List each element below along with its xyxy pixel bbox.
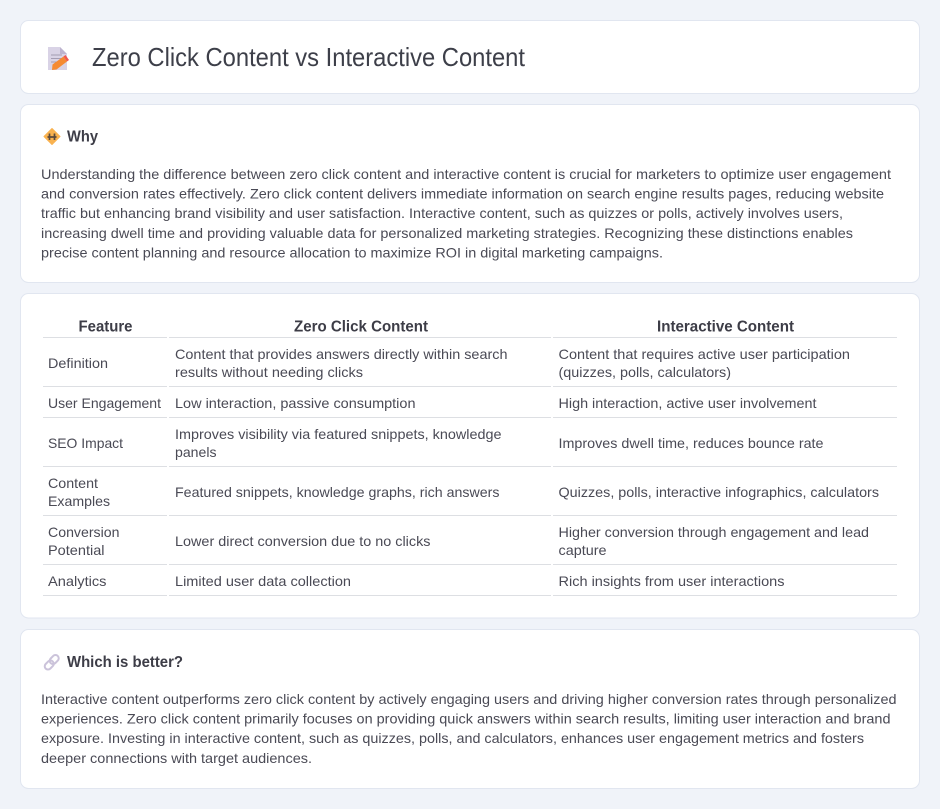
icon: chain link [43, 654, 60, 671]
text block: which is better paragraph: experiences. Zero click content primarily focuses on providing quick answers within search results, limiting user interaction and brand [41, 711, 890, 727]
panel: comparison table [20, 294, 920, 618]
panel: why [20, 104, 920, 282]
row: definition: Definition [48, 355, 108, 371]
row: definition [48, 346, 850, 380]
row: analytics [48, 573, 784, 589]
row: seo impact: SEO Impact [48, 435, 123, 451]
text block: why paragraph: increasing dwell time and providing valuable data for personalized marketing strategies. Recognizing these distinctions enables [41, 225, 853, 241]
heading: which is better: Which is better? [67, 654, 183, 671]
table header row: Zero Click Content [294, 318, 429, 336]
row: content examples: Featured snippets, knowledge graphs, rich answers [175, 484, 499, 500]
row: conversion potential [48, 524, 869, 558]
row: content examples [48, 475, 879, 509]
text block: why paragraph: traffic but enhancing brand visibility and user satisfaction. Interactive content, such as quizzes or polls, actively involves users, [41, 205, 843, 221]
row: definition: Content that provides answers directly within search [175, 346, 508, 362]
panel: which is better [20, 630, 920, 788]
text block: why paragraph: and conversion rates effectively. Zero click content delivers immediate information on search engine results pages, reducing website [41, 186, 884, 202]
text block: which is better paragraph [41, 691, 896, 766]
table header row [78, 318, 795, 336]
text block: which is better paragraph: exposure. Investing in interactive content, such as quizzes, polls, and calculators, enhances user engagement metrics and fosters [41, 730, 864, 746]
row: analytics: Limited user data collection [175, 573, 351, 589]
row: definition: results without needing clicks [175, 364, 363, 380]
panel: header [20, 20, 920, 94]
title: Zero Click Content vs Interactive Content [92, 44, 525, 72]
row: content examples: Content [48, 475, 98, 491]
table header row: Interactive Content [657, 318, 795, 336]
row: user engagement: Low interaction, passive consumption [175, 395, 416, 411]
icon: warning diamond [44, 128, 60, 144]
row: content examples: Quizzes, polls, interactive infographics, calculators [558, 484, 879, 500]
row: seo impact: panels [175, 444, 216, 460]
row: user engagement: High interaction, active user involvement [558, 395, 817, 411]
row: conversion potential: Higher conversion through engagement and lead [558, 524, 869, 540]
row: seo impact: Improves dwell time, reduces bounce rate [558, 435, 824, 451]
row: user engagement: User Engagement [48, 395, 161, 411]
row: conversion potential: Conversion [48, 524, 120, 540]
row: analytics: Analytics [48, 573, 106, 589]
row: definition: (quizzes, polls, calculators) [558, 364, 731, 380]
row: conversion potential: Potential [48, 542, 104, 558]
row: content examples: Examples [48, 493, 110, 509]
text block: why paragraph [41, 166, 891, 260]
row: seo impact [48, 426, 824, 460]
text block: why paragraph: precise content planning and resource allocation to maximize ROI in digital marketing campaigns. [41, 244, 663, 260]
row: seo impact: Improves visibility via featured snippets, knowledge [175, 426, 502, 442]
row: user engagement [48, 395, 817, 411]
row: definition: Content that requires active user participation [558, 346, 850, 362]
row: conversion potential: Lower direct conversion due to no clicks [175, 533, 430, 549]
row: conversion potential: capture [558, 542, 607, 558]
row: analytics: Rich insights from user interactions [558, 573, 784, 589]
table header row: Feature [78, 318, 133, 336]
heading: why: Why [67, 128, 98, 146]
text block: which is better paragraph: deeper connections with target audiences. [41, 750, 312, 766]
text block: why paragraph: Understanding the difference between zero click content and interactive content is crucial for marketers to optimize user engagement [41, 166, 891, 182]
icon: document with pencil [48, 47, 69, 70]
text block: which is better paragraph: Interactive content outperforms zero click content by actively engaging users and driving higher conversion rates through personalized [41, 691, 896, 707]
